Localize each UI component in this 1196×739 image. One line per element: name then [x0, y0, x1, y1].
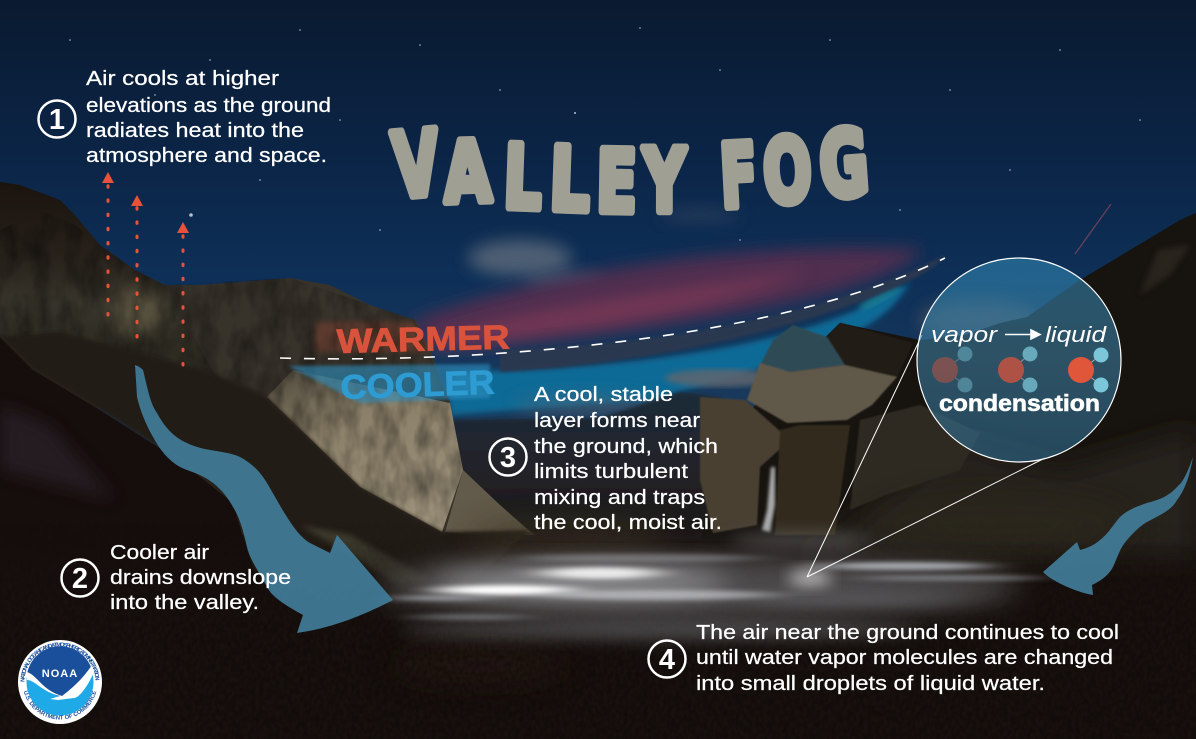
- liquid molecule: [1068, 348, 1108, 392]
- title: L: [548, 129, 591, 231]
- warmer label: WARMER: [336, 318, 510, 361]
- boundary dashed line: [280, 258, 945, 359]
- NOAA logo: U.S. DEPARTMENT OF COMMERCE: [24, 690, 96, 720]
- dark forest floor: [0, 535, 1196, 739]
- title: A: [442, 124, 493, 223]
- title: L: [502, 126, 543, 229]
- step 4 badge: 4: [659, 644, 675, 676]
- right dark mountain: [700, 213, 1196, 560]
- step 1 text: elevations as the ground: [86, 95, 331, 117]
- background: ground base: [0, 500, 1196, 739]
- step 4 text: The air near the ground continues to cool: [696, 622, 1119, 644]
- step 3 badge: [490, 438, 526, 476]
- step 2 text: Cooler air: [110, 542, 209, 564]
- rock texture: [0, 210, 463, 532]
- step 3 text: layer forms near: [534, 410, 700, 432]
- faded molecule: [932, 346, 972, 392]
- step 1 badge: [38, 100, 76, 138]
- scree patch: [0, 405, 115, 500]
- haze: [665, 369, 775, 387]
- title: F: [718, 126, 759, 229]
- cliff base: [775, 425, 850, 535]
- step 3 text: limits turbulent: [534, 461, 689, 483]
- step 2 badge: 2: [72, 563, 88, 595]
- left mountain: [0, 182, 270, 420]
- lit rock patch: [113, 288, 163, 336]
- left drainage arrow: [135, 365, 393, 633]
- step 1 text: [86, 68, 331, 167]
- dark band at boundary: [500, 255, 945, 372]
- distant valley: [450, 392, 800, 540]
- arrow a: [102, 172, 114, 315]
- right mountain rock patch: [1140, 245, 1190, 295]
- title: G: [816, 110, 872, 218]
- step 4 badge: [648, 640, 686, 678]
- dome: [760, 325, 845, 372]
- NOAA logo: NOAA: [42, 668, 78, 680]
- title: O: [761, 118, 814, 224]
- NOAA logo: NATIONAL OCEANIC AND ATMOSPHERIC ADMINISTRATION: [20, 642, 100, 682]
- lit rock: [747, 363, 897, 423]
- step 1 badge: 1: [49, 104, 65, 136]
- dark shoulder: [827, 323, 913, 377]
- stars: [69, 27, 1141, 254]
- cool air layer band: [450, 282, 910, 415]
- middle molecule: [998, 346, 1038, 392]
- step 1 text: atmosphere and space.: [86, 145, 327, 167]
- step 3 badge: 3: [500, 442, 516, 474]
- condensation callout: [917, 258, 1121, 462]
- step 3: [490, 384, 722, 534]
- waterfall: [762, 467, 775, 532]
- clouds: [468, 209, 1040, 340]
- step 4 text: [696, 622, 1119, 695]
- central cliffs: [700, 322, 976, 536]
- step 2: [62, 542, 291, 614]
- step 1 text: radiates heat into the: [86, 120, 304, 142]
- step 3 text: the cool, moist air.: [534, 512, 722, 534]
- fog: [380, 533, 1045, 639]
- step 4 text: until water vapor molecules are changed: [696, 647, 1113, 669]
- step 1: [38, 68, 331, 167]
- condensation label: condensation: [939, 390, 1100, 416]
- slope rock streak: [300, 525, 430, 585]
- title: [389, 110, 872, 233]
- title: Y: [642, 130, 687, 232]
- step 3 text: A cool, stable: [534, 384, 673, 406]
- step 3 text: mixing and traps: [534, 487, 705, 509]
- step 1 text: Air cools at higher: [86, 68, 279, 90]
- step 4 text: into small droplets of liquid water.: [696, 673, 1045, 695]
- right rock: [850, 405, 980, 510]
- cool band highlight: [856, 281, 904, 313]
- callout lines: [807, 335, 1045, 577]
- right drainage arrow: [1043, 457, 1193, 595]
- NOAA logo: [18, 640, 102, 724]
- front cliff: [700, 397, 790, 533]
- pink glow: [430, 270, 810, 348]
- vapor label: vapor: [931, 322, 999, 347]
- fine forest texture: [452, 658, 521, 676]
- step 3 text: the ground, which: [534, 436, 718, 458]
- dark lower-left hillside: [0, 337, 420, 739]
- right forest: [800, 430, 1196, 560]
- cooler label: COOLER: [340, 364, 495, 407]
- arrow c: [177, 222, 189, 365]
- forested slope: [0, 332, 530, 620]
- title: E: [596, 133, 638, 233]
- liquid label: liquid: [1045, 322, 1107, 347]
- step 2 text: into the valley.: [110, 592, 259, 614]
- El Capitan lit face: [267, 370, 530, 535]
- step 2 text: [110, 542, 291, 614]
- warm air layer band: [410, 248, 923, 348]
- cooler band on cliff: [288, 364, 490, 403]
- rising air arrows: [102, 172, 189, 365]
- arrow: [1005, 330, 1040, 339]
- warm tint on cliff: [315, 322, 430, 352]
- step 2 badge: [62, 560, 98, 596]
- arrow b: [131, 195, 143, 337]
- step 3 text: [534, 384, 722, 534]
- forest tint: [390, 495, 1130, 683]
- title: V: [389, 111, 443, 218]
- step 2 text: drains downslope: [110, 567, 291, 589]
- El Capitan mass: [135, 278, 535, 535]
- step 4: [648, 622, 1119, 695]
